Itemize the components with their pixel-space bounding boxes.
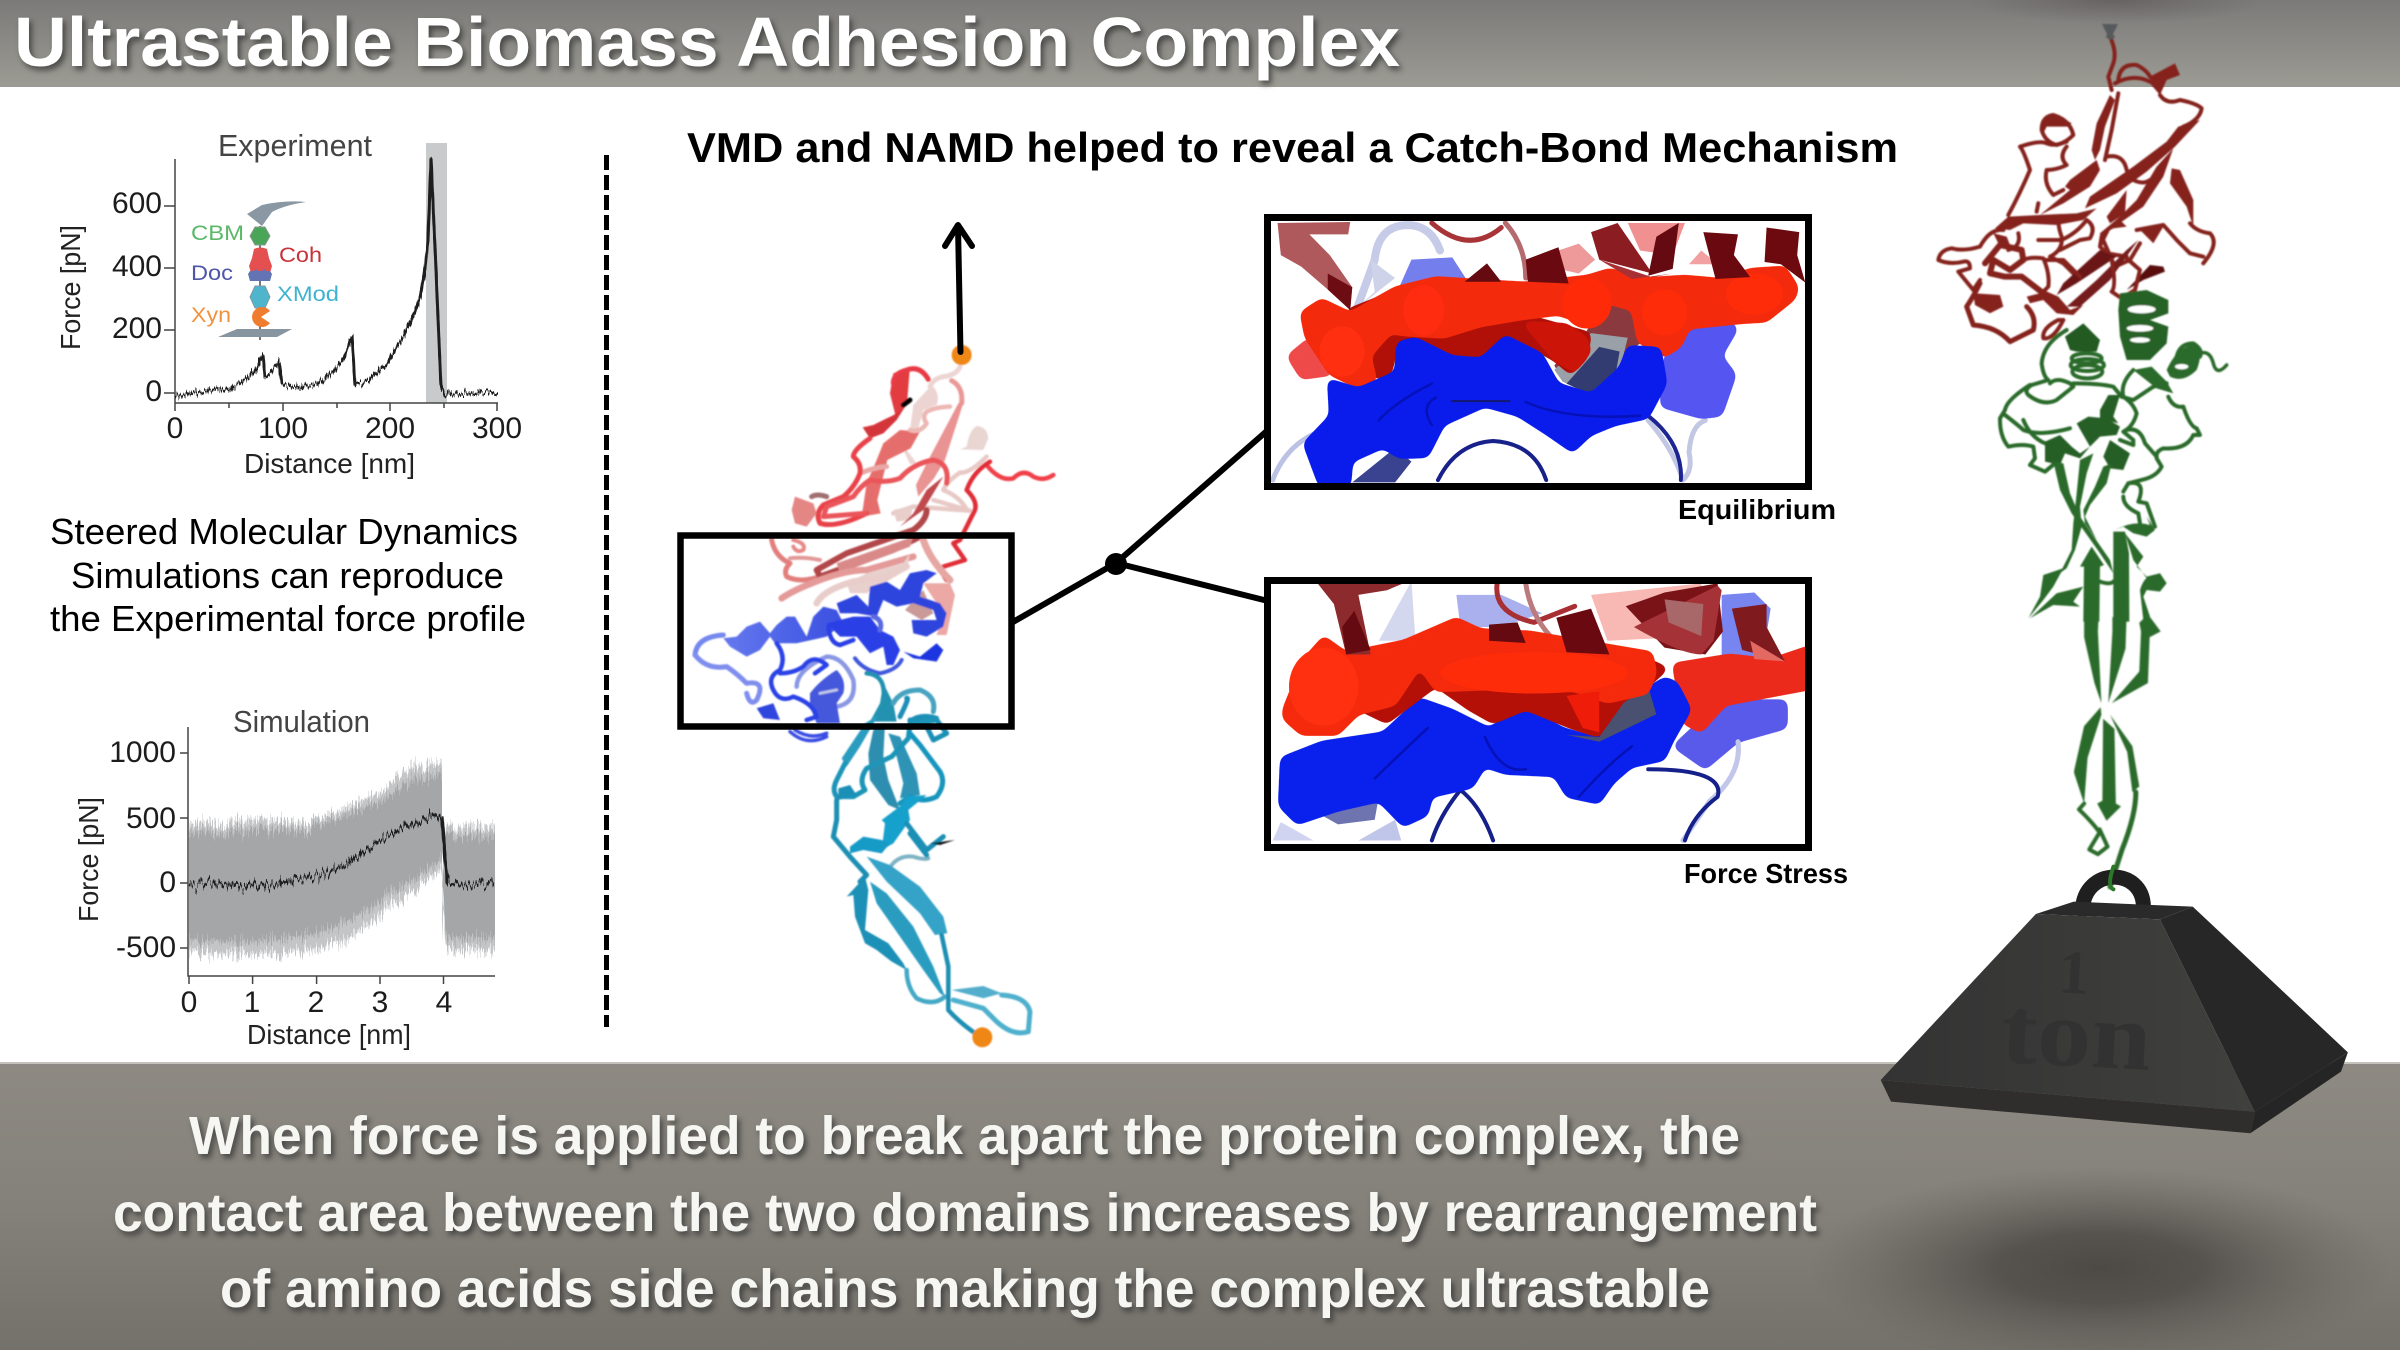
background ribbons	[1273, 581, 1787, 840]
upper domains (crop space)	[695, 345, 1053, 741]
experiment x ticks	[167, 412, 522, 445]
pulling point (top)	[952, 345, 972, 365]
simulation title: Simulation	[233, 704, 370, 739]
experiment y ticks: 400	[112, 250, 162, 283]
green x-module domain	[2000, 290, 2227, 622]
experiment x ticks: 0	[167, 412, 183, 445]
lower xmod domain	[833, 715, 1030, 1047]
green lower strands	[2074, 614, 2161, 887]
force stress frame	[1268, 580, 1808, 848]
mean force trace	[189, 814, 494, 888]
cohesin domain (red)	[772, 367, 1053, 635]
experiment y ticks: 200	[112, 312, 162, 345]
title: Ultrastable Biomass Adhesion Complex	[14, 3, 1400, 81]
simulation x label: Distance [nm]	[247, 1019, 411, 1050]
experiment chart	[55, 128, 522, 479]
simulation y ticks: -500	[116, 931, 176, 964]
weight: 1 ton	[1881, 867, 2348, 1133]
component labels: Doc	[191, 262, 233, 285]
red cohesin domain	[1938, 41, 2214, 342]
summary text: When force is applied to break apart the protein complex, the	[189, 1106, 1740, 1166]
stalk	[259, 226, 261, 340]
protein: hanging complex	[1938, 24, 2227, 887]
simulation y label: Force [pN]	[73, 797, 104, 922]
equilibrium label: Equilibrium	[1678, 494, 1836, 525]
top title band	[0, 0, 2400, 87]
component labels: XMod	[277, 283, 339, 306]
xylanase pac-man	[252, 307, 270, 327]
inset: molecular assembly	[191, 201, 339, 340]
force spread band	[186, 774, 498, 942]
CBM hexagon	[250, 227, 270, 245]
top face	[2036, 902, 2193, 919]
panel: force stress	[1266, 577, 1811, 849]
simulation x ticks: 2	[308, 986, 324, 1019]
bottom summary band	[0, 1062, 2400, 1350]
simulation x ticks: 0	[181, 986, 197, 1019]
SMD description text: Simulations can reproduce	[71, 555, 504, 596]
force stress label: Force Stress	[1684, 858, 1848, 889]
summary text	[113, 1106, 1817, 1319]
spread spikes	[186, 764, 498, 955]
simulation axes	[180, 727, 495, 984]
secondary cohesin surface	[1673, 645, 1811, 733]
experiment title: Experiment	[218, 128, 372, 163]
simulation y ticks	[109, 736, 176, 964]
cantilever	[247, 201, 306, 226]
simulation x ticks: 3	[372, 986, 388, 1019]
protein: cohesin-dockerin-xmod ribbon	[695, 345, 1053, 1047]
pulling arrow	[945, 225, 972, 352]
simulation y ticks: 0	[159, 866, 176, 899]
XMod hexagon	[250, 286, 270, 308]
weight text: ton: ton	[1999, 976, 2154, 1091]
experiment x label: Distance [nm]	[244, 448, 415, 479]
experiment x ticks: 300	[472, 412, 522, 445]
simulation x ticks: 1	[244, 986, 260, 1019]
dashed divider	[604, 155, 609, 1027]
SMD description text: the Experimental force profile	[50, 598, 526, 639]
component labels	[191, 222, 339, 327]
summary text: of amino acids side chains making the complex ultrastable	[220, 1259, 1710, 1319]
heading: catch-bond mechanism: VMD and NAMD helped to reveal a Catch-Bond Mechanism	[687, 124, 1898, 171]
teal linker and top of xmod	[867, 673, 937, 722]
base front	[1881, 1080, 2255, 1133]
experiment x ticks: 200	[365, 412, 415, 445]
dark helices	[1318, 583, 1785, 661]
ceiling anchor	[2102, 24, 2118, 41]
strand through ring	[2110, 867, 2113, 889]
experiment axes	[164, 159, 498, 411]
simulation y ticks: 1000	[109, 736, 176, 769]
selection box	[680, 536, 1012, 726]
experiment y ticks: 0	[145, 375, 162, 408]
weight floor shadow	[1810, 1168, 2390, 1350]
ceiling shadow	[1965, 0, 2265, 24]
experiment y ticks: 600	[112, 187, 162, 220]
component labels: Coh	[279, 244, 322, 267]
background ribbons	[1273, 223, 1738, 482]
anchor point (bottom)	[972, 1027, 992, 1047]
connector node	[1105, 553, 1127, 575]
dark helices	[1278, 222, 1805, 310]
dockerin surface	[1303, 335, 1667, 487]
summary text: contact area between the two domains increases by rearrangement	[113, 1183, 1817, 1243]
SMD description text: Steered Molecular Dynamics	[50, 511, 518, 552]
SMD description text	[50, 511, 526, 639]
simulation x ticks: 4	[436, 986, 452, 1019]
cohesin surface	[1300, 267, 1798, 388]
lifting ring	[2082, 877, 2143, 910]
simulation chart	[73, 704, 498, 1050]
cohesin surface	[1283, 618, 1656, 735]
equilibrium frame	[1268, 218, 1808, 486]
cohesin surface shadow layer	[1348, 296, 1591, 378]
panel: equilibrium	[1266, 214, 1811, 488]
interface cavity	[1554, 306, 1640, 388]
component labels: Xyn	[191, 304, 231, 327]
left-front face	[1881, 914, 2255, 1112]
experiment y label: Force [pN]	[55, 225, 86, 350]
weight text: 1: 1	[2057, 938, 2091, 1008]
force trace	[175, 158, 498, 396]
right face	[2160, 907, 2348, 1112]
base right	[2250, 1052, 2348, 1133]
dockerin	[248, 269, 272, 281]
simulation x ticks	[181, 986, 452, 1019]
experiment x ticks: 100	[258, 412, 308, 445]
connector lines	[1013, 430, 1268, 622]
simulation y ticks: 500	[126, 802, 176, 835]
dockerin domain (blue)	[695, 570, 947, 741]
surface plate	[218, 329, 292, 337]
highlighted rupture region	[426, 143, 447, 403]
dockerin surface	[1279, 677, 1691, 827]
cohesin shadow layer	[1364, 660, 1666, 737]
experiment y ticks	[112, 187, 162, 408]
component labels: CBM	[191, 222, 244, 245]
cohesin	[249, 248, 272, 273]
